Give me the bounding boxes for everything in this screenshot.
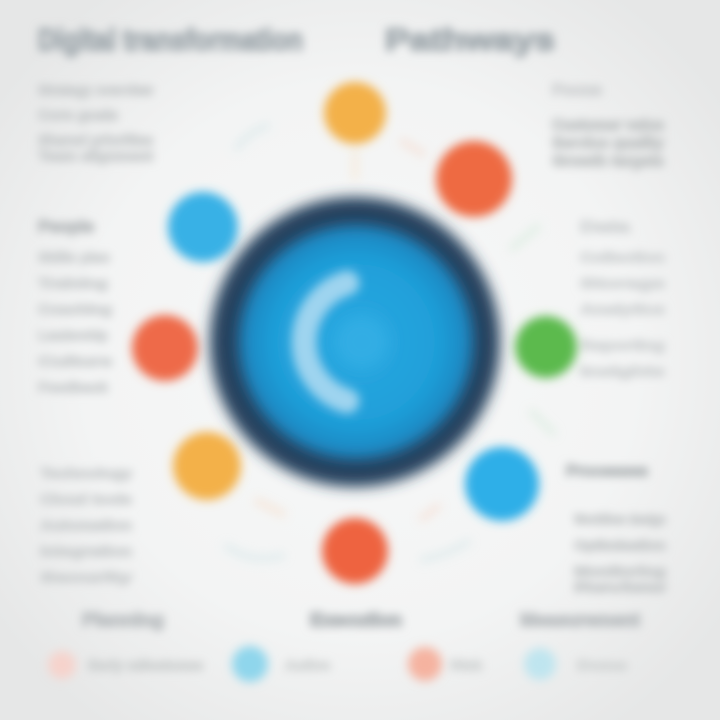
text block: middle right <box>580 219 665 379</box>
text block: middle left: Culture <box>38 353 112 369</box>
faint connectors around the hub <box>225 125 555 560</box>
legend marker: blue <box>232 646 268 682</box>
text block: lower right: Monitoring <box>574 563 666 579</box>
heading: left: Planning <box>82 610 164 630</box>
text block: middle left: Skills plan <box>38 249 110 265</box>
text block: lower right: Workflow design <box>574 511 666 527</box>
legend marker: pale blue <box>524 648 556 680</box>
text block: lower right: Processes <box>566 463 648 480</box>
text block: lower left: Technology <box>40 465 132 481</box>
text block: middle left: Feedback <box>38 379 108 395</box>
text block: middle right: Storage <box>580 275 665 291</box>
text block: lower left: Integration <box>40 543 132 559</box>
legend label: first: Early milestones <box>88 657 203 673</box>
text block: middle left: People <box>38 217 94 236</box>
hub: dark outer ring <box>210 197 500 487</box>
node: blue lower right <box>465 447 539 521</box>
central hub <box>210 197 500 487</box>
title: Digital transformation <box>38 22 303 57</box>
legend marker: salmon <box>408 647 442 681</box>
heading: right: Measurement <box>520 610 640 630</box>
legend label: third: Risk <box>450 657 482 673</box>
text block: top right: Focus <box>552 82 602 99</box>
node: orange top <box>324 82 386 144</box>
text block: middle right: Reporting <box>580 337 665 353</box>
title <box>38 22 555 57</box>
text block: lower left: Cloud tools <box>40 491 132 507</box>
heading: centre: Execution <box>310 610 402 630</box>
text block: top right: Service quality <box>552 135 664 152</box>
node: red bottom <box>322 518 388 584</box>
text block: top left: Team alignment <box>38 148 153 165</box>
text block: middle left <box>38 217 112 395</box>
text block: top right <box>552 82 664 170</box>
text block: middle right: Analytics <box>580 301 665 317</box>
legend marker: pale red <box>48 651 76 679</box>
legend label: second: Active <box>285 657 330 673</box>
text block: middle left: Leadership <box>38 327 108 343</box>
text block: lower right: Review <box>574 579 666 595</box>
text block: top left: Strategy overview <box>38 82 153 99</box>
hub: blue core <box>239 225 473 459</box>
text block: top right: Customer value <box>552 117 664 134</box>
text block: middle left: Training <box>38 275 108 291</box>
node: orange lower left <box>173 432 241 500</box>
hub: light crescent <box>304 283 347 401</box>
text block: top left <box>38 82 153 165</box>
text block: middle left: Coaching <box>38 301 112 317</box>
text block: middle right: Data <box>580 219 630 236</box>
legend label: fourth: Done <box>577 657 627 673</box>
bottom column headings <box>82 610 640 630</box>
text block: top right: Growth targets <box>552 153 664 170</box>
text block: top left: Core goals <box>38 107 118 124</box>
node: red left <box>132 315 198 381</box>
hub: centre glow <box>336 316 388 368</box>
node: red top right <box>436 141 512 217</box>
text block: lower left: Security <box>40 569 132 585</box>
legend <box>48 646 627 682</box>
title: Pathways <box>385 22 555 57</box>
text block: lower right: Optimisation <box>574 537 666 553</box>
node: blue upper left <box>168 192 238 262</box>
text block: lower right <box>566 463 666 595</box>
node: green right <box>515 316 577 378</box>
text block: middle right: Collection <box>580 249 665 265</box>
text block: lower left: Automation <box>40 517 132 533</box>
text block: middle right: Insights <box>580 363 665 379</box>
text block: lower left <box>40 465 132 585</box>
text block: top left: Shared priorities <box>38 132 153 149</box>
satellite nodes <box>132 82 577 584</box>
